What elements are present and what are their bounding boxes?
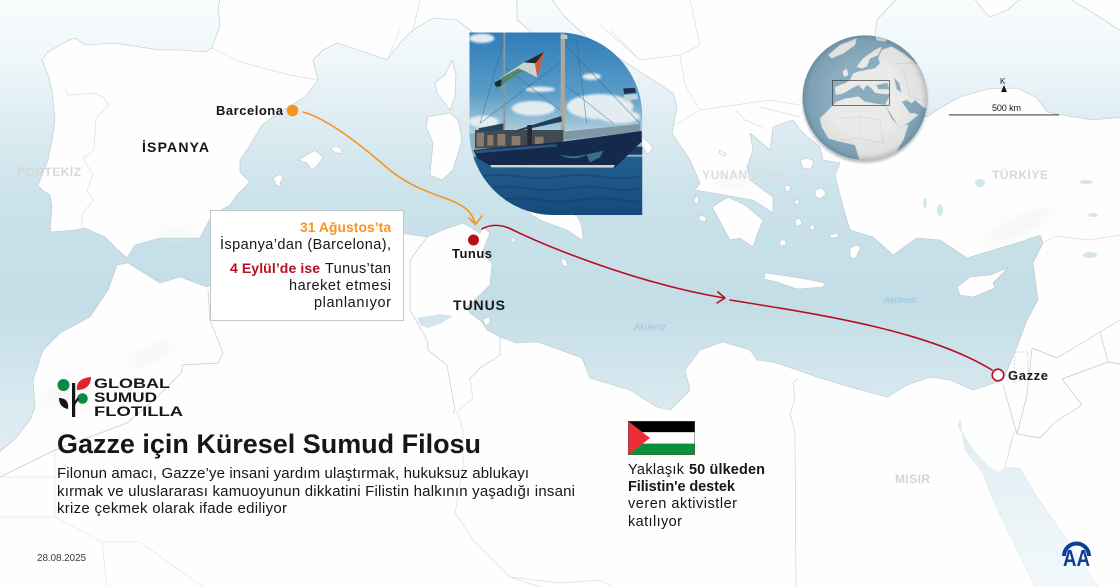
callout: departure dates: planlanıyor	[314, 295, 391, 311]
globe: Iceland and north	[875, 36, 888, 42]
scale bar	[949, 103, 1059, 116]
marker: Gazze	[992, 369, 1004, 381]
island: Mallorca	[298, 150, 323, 170]
label: Barcelona: Barcelona	[216, 103, 284, 118]
globe: Black Sea	[876, 83, 889, 89]
label: Tunus city: Tunus	[452, 246, 492, 261]
label: Akdeniz west: Akdeniz	[633, 322, 666, 333]
scale bar: 500 km	[992, 103, 1021, 113]
island: Sardinia	[426, 113, 462, 180]
label: İspanya: İSPANYA	[142, 139, 209, 155]
text: activists: Yaklaşık	[628, 462, 685, 478]
globe: Africa	[820, 97, 908, 162]
globe land	[820, 35, 933, 162]
route: Barcelona to Tunus	[303, 112, 482, 224]
north arrow: K	[1000, 77, 1006, 86]
boat rigging	[480, 40, 640, 123]
label: Portekiz: PORTEKİZ	[17, 164, 81, 179]
arrowhead: orange	[469, 216, 482, 224]
island: Corsica	[435, 60, 456, 110]
globe: map extent rectangle	[832, 80, 889, 105]
logo: Global Sumud Flotilla: GLOBAL	[94, 376, 170, 391]
islands: Aegean and Ionian	[483, 150, 861, 326]
boat hull	[473, 131, 642, 168]
land: north-east shore	[1067, 0, 1120, 32]
description text	[57, 465, 575, 517]
globe: Greenland	[828, 38, 857, 58]
island: Sicily	[520, 205, 583, 241]
north arrow	[1000, 77, 1007, 92]
description text: Filonun amacı, Gazze’ye insani yardım ulaştırmak, hukuksuz ablukayı	[57, 465, 529, 482]
photo clouds	[468, 34, 640, 128]
date: 28.08.2025	[37, 553, 86, 564]
island: Crete	[764, 273, 825, 289]
island: Menorca	[330, 146, 342, 154]
photo: sailing boat with Palestinian flag	[468, 32, 643, 217]
route: Tunus to Gazze	[482, 225, 992, 370]
logo: Anadolu Agency: AA	[1063, 545, 1090, 571]
callout: departure dates: Tunus’tan	[325, 261, 391, 277]
arrowhead: red	[717, 292, 725, 303]
text: activists	[628, 462, 765, 530]
globe locator	[802, 35, 933, 163]
island: Cyprus	[957, 268, 1008, 297]
label: Yunanistan: YUNANİSTAN	[702, 167, 785, 182]
island: Ibiza	[273, 174, 283, 187]
text: activists: 50 ülkeden	[689, 462, 765, 478]
label: Akdeniz east: Akdeniz	[883, 295, 916, 306]
callout: departure dates: 31 Ağustos’ta	[300, 220, 391, 235]
label: Mısır: MISIR	[895, 472, 930, 486]
icon: Palestinian flag	[628, 421, 695, 455]
description text: kırmak ve uluslararası kamuoyunun dikkatini Filistin halkının yaşadığı insani	[57, 483, 575, 500]
marker: Barcelona	[287, 105, 298, 116]
logo: Global Sumud Flotilla	[58, 376, 183, 419]
island: Peloponnese	[712, 197, 763, 247]
title: Gazze için Küresel Sumud Filosu	[57, 429, 481, 459]
globe: Scandinavia	[857, 47, 882, 68]
callout: departure dates: 4 Eylül’de ise	[230, 260, 320, 276]
logo: Global Sumud Flotilla: FLOTILLA	[94, 404, 183, 419]
logo: Global Sumud Flotilla: SUMUD	[94, 390, 157, 405]
land: Crimea and north shore	[973, 0, 1023, 17]
map: Red Sea	[958, 420, 1100, 587]
boat flag	[493, 52, 544, 92]
description text: krize çekmek olarak ifade ediliyor	[57, 500, 287, 517]
map: terrain shading	[32, 174, 1060, 413]
globe: Caspian	[894, 77, 902, 93]
text: activists: Filistin'e destek	[628, 479, 736, 495]
map: inland water	[417, 179, 1098, 328]
globe: Europe and Asia	[835, 47, 933, 127]
text: activists: veren aktivistler	[628, 496, 737, 512]
callout: departure dates	[210, 210, 404, 320]
globe: UK	[843, 68, 848, 77]
marker: Tunus	[468, 234, 479, 246]
text: activists: katılıyor	[628, 514, 682, 530]
label: Tunus country: TUNUS	[453, 297, 505, 313]
boat deck and crew	[475, 130, 563, 148]
label: Türkiye: TÜRKİYE	[992, 167, 1048, 182]
callout: departure dates: İspanya’dan (Barcelona),	[220, 235, 391, 253]
callout: departure dates: hareket etmesi	[289, 278, 391, 294]
land: Iberia, France and Italy	[38, 0, 653, 258]
label: Gazze: Gazze	[1008, 368, 1048, 383]
globe: borders	[840, 63, 933, 143]
small flag	[623, 88, 636, 94]
